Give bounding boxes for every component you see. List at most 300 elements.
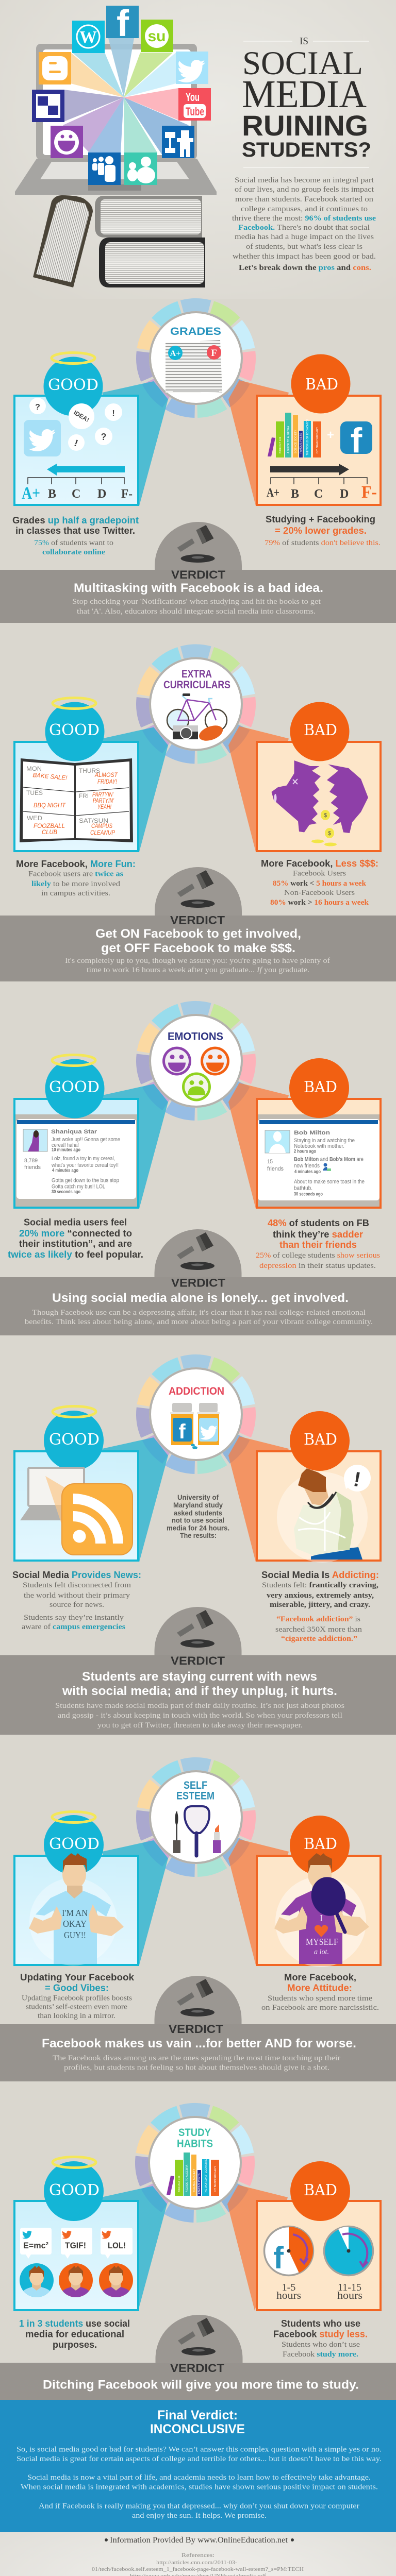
calendar: PARTYIN': [92, 791, 114, 798]
calendar: ALMOST: [94, 771, 118, 778]
caption: bad: = 20% lower grades.: [275, 526, 367, 536]
caption: bad: Students who don’t use: [282, 2341, 360, 2349]
text: study note: asked students: [174, 1509, 222, 1517]
clock labels: [276, 2282, 362, 2301]
panel: good: [14, 1811, 138, 1965]
panel: good: [14, 1055, 138, 1208]
wheel: self esteem: [102, 1742, 289, 1965]
icon: delicious: [32, 90, 64, 122]
shirt text: MYSELF: [306, 1937, 338, 1947]
calendar: MON: [26, 765, 42, 772]
tweet bubbles: [20, 2228, 133, 2259]
figure: narcissist: [274, 1853, 369, 1964]
title: RUINING: [242, 109, 368, 142]
final verdict heading: Final Verdict:: [157, 2408, 238, 2422]
clock labels: hours: [337, 2290, 362, 2301]
clock: 1-5 hours: [264, 2227, 314, 2275]
calendar: FOOZBALL: [34, 822, 65, 829]
panel: good: C: [72, 487, 80, 501]
caption: bad: 25% of college students show serious: [256, 1251, 380, 1260]
caption: bad: Facebook study more.: [283, 2350, 358, 2359]
icon: blogger: [39, 52, 71, 84]
caption: good: [8, 1217, 143, 1260]
profile: Bob Milton: Notebook with mother.: [294, 1143, 344, 1149]
icon: stumbleupon: su: [147, 28, 166, 45]
panel: good: ?: [101, 432, 106, 442]
icon: pill bottles: f: [178, 1420, 186, 1443]
calendar: CLEANUP: [90, 829, 115, 836]
text: study note: media for 24 hours.: [167, 1524, 229, 1532]
icon: books: FAMOUS POETS: [300, 433, 303, 453]
caption: good: Grades up half a gradepoint: [12, 515, 139, 526]
icon: exclamation bubble: [344, 1465, 371, 1492]
panel: good: GOOD: [49, 2181, 100, 2199]
verdict: addiction: [0, 1607, 396, 1735]
verdict: grades: Stop checking your 'Notifications' when studying and hit the books to get: [72, 598, 321, 606]
panel: bad: +: [327, 428, 334, 442]
panel: good: ?: [35, 403, 40, 412]
section: emotions: [0, 986, 396, 1335]
panel: good: GOOD: [48, 376, 98, 394]
panel: bad: [257, 1816, 381, 1967]
caption: bad: Non-Facebook Users: [284, 889, 355, 897]
caption: good: 75% of students want to: [34, 539, 113, 547]
wheel: study habits: STUDY: [178, 2127, 211, 2139]
calendar: FRI: [79, 792, 89, 800]
panel: good: [14, 1406, 138, 1561]
caption: good: [12, 515, 139, 556]
mirror: [307, 1873, 350, 1932]
caption: good: [16, 859, 136, 897]
profile: Shaniqua Star: cereal! haha!: [52, 1142, 79, 1148]
panel: bad: F-: [361, 483, 377, 502]
intro paragraph: Social media has become an integral part: [235, 176, 374, 184]
icon: broken piggy bank: $: [324, 812, 327, 819]
shirt text: [306, 1913, 338, 1956]
caption: good: collaborate online: [42, 548, 105, 556]
panel: bad: BAD: [304, 1431, 337, 1449]
profile: Bob Milton: [265, 1130, 365, 1197]
caption: good: likely to be more involved: [31, 880, 121, 888]
panel: good: B: [48, 487, 56, 501]
calendar: CLUB: [42, 828, 57, 836]
caption: good: in campus activities.: [41, 889, 110, 897]
icon: youtube: Tube: [186, 105, 204, 118]
profile: Bob Milton: About to make some toast in the: [294, 1179, 365, 1185]
clock: 1-5 hours: f: [273, 2241, 284, 2275]
icon: youtube: You: [186, 91, 200, 104]
profile: Shaniqua Star: Shaniqua Star: [51, 1129, 97, 1135]
icon: robot figures: [162, 126, 194, 158]
verdict: emotions: benefits. Think less about being alone, and more about being a part of your vibrant college community.: [25, 1318, 373, 1326]
icon: mirror, mascara, lipstick: [173, 1806, 221, 1856]
tweet bubbles: E=mc²: [23, 2241, 48, 2250]
tweet bubbles: TGIF!: [65, 2241, 86, 2250]
caption: good: the world without their primary: [24, 1591, 130, 1600]
icon: books: BIOLOGY 101: [178, 2176, 181, 2192]
icon: messenger: [124, 152, 157, 185]
icon: rss: [62, 1484, 133, 1555]
panel: bad: [257, 1411, 381, 1563]
caption: bad: [261, 1972, 379, 2012]
icon: wordpress: [72, 21, 105, 53]
caption: bad: than their friends: [279, 1240, 357, 1250]
wheel: study habits: [101, 2088, 288, 2311]
laptop: [15, 44, 217, 195]
profile: Bob Milton: bathtub.: [294, 1185, 312, 1192]
calendar: WED: [27, 815, 42, 822]
verdict: self esteem: [0, 1976, 396, 2081]
verdict: extra curriculars: time to work 16 hours a week after you graduate... If you graduate.: [87, 966, 309, 974]
shirt text: a lot.: [314, 1948, 329, 1956]
caption: bad: [265, 514, 381, 547]
panel: good: IDEA!: [72, 409, 91, 423]
caption: good: students’ self-esteem even more: [26, 2003, 127, 2011]
verdict: grades: [0, 522, 396, 623]
avatars: [19, 2263, 134, 2298]
verdict: self esteem: profiles, but students not feeling so hot about themselves should give it a shot.: [64, 2064, 329, 2072]
panel: bad: f: [351, 421, 362, 460]
panel: good: GOOD: [49, 1078, 100, 1096]
caption: good: in classes that use Twitter.: [15, 526, 135, 536]
icon: broken piggy bank: $: [328, 831, 331, 837]
intro paragraph: more than students. Facebook started on: [235, 195, 374, 204]
icon: yahoo: [51, 126, 83, 158]
profile: Bob Milton: 30 seconds ago: [294, 1192, 323, 1197]
title: IS: [300, 36, 308, 47]
title: SOCIAL: [242, 45, 363, 82]
caption: good: twice as likely to feel popular.: [8, 1249, 143, 1260]
wheel: self esteem: ESTEEM: [176, 1790, 214, 1802]
icon: stumbleupon: [141, 20, 173, 52]
verdict: emotions: [0, 1229, 396, 1335]
final verdict heading: INCONCLUSIVE: [150, 2422, 245, 2436]
profile: Bob Milton: Bob Milton and Bob's Mom are: [294, 1156, 364, 1162]
icon: broken piggy bank: [271, 760, 368, 846]
clock labels: hours: [276, 2290, 301, 2301]
wheel: grades: [102, 283, 289, 506]
icon: books: DIY BRAIN SURGERY: [316, 427, 319, 453]
icon: pill bottles: [170, 1403, 220, 1449]
caption: bad: searched 350X more than: [275, 1625, 362, 1634]
verdict: grades: Multitasking with Facebook is a bad idea.: [74, 581, 323, 595]
icon: facebook: f: [117, 3, 129, 44]
icon: exclamation bubble: !: [352, 1468, 362, 1492]
caption: bad: Studying + Facebooking: [266, 514, 375, 524]
wheel: extra curriculars: EXTRA: [182, 668, 212, 680]
calendar: YEAH!: [97, 803, 111, 810]
stack of books: [33, 195, 205, 287]
caption: bad: Facebook study less.: [273, 2329, 368, 2339]
shirt text: I'M AN: [62, 1908, 88, 1918]
verdict: study habits: [0, 2315, 396, 2400]
verdict: study habits: Ditching Facebook will give you more time to study.: [43, 2378, 359, 2392]
section: grades: [0, 283, 396, 623]
verdict: study habits: VERDICT: [170, 2362, 225, 2375]
caption: good: source for news.: [50, 1601, 104, 1609]
profile: Shaniqua Star: 4 minutes ago: [52, 1167, 78, 1173]
verdict: extra curriculars: VERDICT: [170, 914, 225, 926]
panel: bad: BAD: [304, 1835, 337, 1853]
panel: bad: C: [314, 487, 323, 501]
caption: bad: [261, 1570, 379, 1643]
final verdict text: and enjoy the sun. It helps. We promise.: [132, 2512, 267, 2520]
verdict: addiction: you to get off Twitter, threaten to take away their newspaper.: [97, 1721, 303, 1730]
section: study habits: [0, 2088, 396, 2400]
title: [242, 36, 371, 168]
panel: bad: [257, 702, 381, 851]
caption: bad: “Facebook addiction” is: [276, 1615, 360, 1623]
profile: Shaniqua Star: 8,789: [24, 1158, 38, 1164]
icon: books: BIOLOGY 101: [279, 437, 282, 453]
icon: books: THE WORLD OF ECONOMICS: [306, 419, 309, 455]
caption: bad: Students felt: frantically craving,: [262, 1581, 378, 1589]
caption: good: purposes.: [53, 2340, 97, 2350]
caption: good: media for educational: [25, 2329, 124, 2339]
caption: bad: 48% of students on FB: [268, 1218, 369, 1228]
caption: bad: depression in their status updates.: [259, 1262, 376, 1270]
intro paragraph: [232, 176, 376, 272]
profile: Bob Milton: now friends: [294, 1163, 320, 1169]
panel: good: GOOD: [49, 721, 100, 739]
verdict: self esteem: Facebook makes us vain ...for better AND for worse.: [42, 2037, 356, 2050]
final verdict text: And if Facebook is really making you that depressed... why don’t you shut down your computer: [39, 2502, 359, 2510]
references: References:: [182, 2552, 214, 2558]
wheel: extra curriculars: CURRICULARS: [163, 679, 230, 691]
profile: Shaniqua Star: [23, 1129, 120, 1194]
icon: bike, camera, football: [167, 693, 227, 743]
caption: good: Facebook users are twice as: [28, 870, 123, 878]
wheel: grades: A+: [170, 349, 180, 358]
panel: bad: BAD: [304, 1078, 337, 1096]
wheel: addiction: ADDICTION: [169, 1385, 224, 1397]
icon: sad face: [182, 1073, 211, 1101]
caption: good: More Facebook, More Fun:: [16, 859, 136, 869]
caption: good: than looking in a mirror.: [38, 2012, 116, 2020]
intro paragraph: whether this impact has been good or bad.: [233, 252, 376, 261]
panel: good: GOOD: [49, 1835, 100, 1853]
text: study note: not to use social: [172, 1516, 224, 1524]
profile: Bob Milton: Staying in and watching the: [294, 1138, 355, 1144]
wheel: self esteem: SELF: [184, 1780, 207, 1791]
verdict: self esteem: VERDICT: [169, 2023, 224, 2036]
caption: good: [19, 2318, 130, 2350]
icon: books: DIY BRAIN SURGERY: [214, 2165, 217, 2192]
verdict: grades: VERDICT: [171, 568, 226, 581]
calendar: [20, 758, 133, 842]
title: MEDIA: [242, 73, 367, 116]
verdict: extra curriculars: get OFF Facebook to make $$$.: [101, 941, 295, 955]
caption: good: [20, 1972, 135, 2020]
calendar: SAT/SUN: [79, 817, 108, 824]
references: 01/tech/facebook.self.esteem_1_facebook-page-facebook-wall-esteem?_s=PM:TECH: [92, 2566, 304, 2572]
tweet bubbles: LOL!: [108, 2241, 126, 2250]
intro paragraph: of students, but what's less clear is: [246, 243, 362, 251]
caption: bad: [273, 2318, 368, 2359]
panel: bad: BAD: [305, 376, 338, 394]
shirt text: [62, 1908, 88, 1940]
caption: good: Students say they’re instantly: [24, 1614, 124, 1622]
panel: bad: BAD: [304, 721, 337, 739]
panel: bad: B: [291, 487, 299, 501]
caption: good: 20% more “connected to: [19, 1228, 132, 1239]
shirt text: I: [320, 1913, 323, 1923]
intro paragraph: college campuses, and it continues to: [241, 205, 368, 213]
caption: good: Social Media Provides News:: [12, 1570, 141, 1580]
icon: books: A GUIDE TO ALGEBRA: [186, 2164, 189, 2192]
panel: good: F-: [121, 487, 133, 501]
calendar: FRIDAY!: [97, 778, 118, 785]
caption: bad: More Attitude:: [287, 1983, 352, 1993]
shirt text: GUY!!: [64, 1930, 86, 1940]
references: [57, 2552, 339, 2576]
icon: books: THE WORLD OF ECONOMICS: [205, 2157, 208, 2194]
text: study note: [167, 1493, 229, 1539]
verdict: extra curriculars: [0, 867, 396, 981]
verdict: addiction: with social media; and if they unplug, it hurts.: [62, 1684, 337, 1698]
profile: Shaniqua Star: Gotta get down to the bus stop: [52, 1178, 119, 1184]
shirt text: OKAY: [63, 1919, 87, 1929]
panel: good: [14, 352, 138, 505]
caption: good: aware of campus emergencies: [22, 1623, 125, 1631]
icon: wordpress: W: [79, 28, 97, 47]
caption: bad: [261, 858, 378, 907]
final verdict text: Social media is great for certain aspects of college and terrible for others... but it doesn’t have to be this way.: [16, 2455, 382, 2463]
caption: bad: “cigarette addiction.”: [281, 1635, 357, 1643]
panel: good: [14, 698, 138, 851]
profile: Shaniqua Star: 10 minutes ago: [52, 1147, 80, 1152]
icon: books: [268, 413, 321, 457]
panel: bad: [257, 2161, 381, 2310]
panel: good: !: [112, 409, 115, 418]
calendar: THURS: [79, 767, 100, 774]
clock: 11-15 hours: [324, 2227, 373, 2275]
colour rays: [63, 38, 189, 155]
icon: twitter: [176, 52, 208, 84]
final verdict text: Social media is now a vital part of life, and academia needs to learn how to effectively take advantage.: [27, 2473, 371, 2482]
wheel: addiction: [102, 1339, 289, 1562]
wheel: study habits: HABITS: [177, 2138, 213, 2149]
caption: bad: very anxious, extremely antsy,: [267, 1591, 374, 1600]
profile: Shaniqua Star: friends: [24, 1164, 41, 1171]
caption: good: 1 in 3 students use social: [19, 2318, 130, 2329]
intro paragraph: Facebook. There's no doubt that social: [238, 224, 370, 232]
footer: [0, 2532, 396, 2576]
final verdict text: [16, 2445, 382, 2520]
profile: Bob Milton: friends: [267, 1166, 284, 1172]
icon: facebook: [106, 3, 139, 44]
icon: books: SCIENCE SOCIETY: [193, 2168, 196, 2192]
verdict: addiction: Students are staying current with news: [82, 1670, 317, 1684]
panel: good: GOOD: [49, 1431, 100, 1449]
text: study note: Maryland study: [173, 1501, 223, 1509]
verdict: addiction: VERDICT: [171, 1654, 225, 1667]
calendar: PARTYIN': [93, 797, 114, 804]
verdict: emotions: VERDICT: [171, 1277, 226, 1289]
section: extra curriculars: [0, 629, 396, 981]
verdict: addiction: Students have made social media part of their daily routine. It’s not just about photos: [55, 1702, 344, 1710]
calendar: CAMPUS: [91, 822, 112, 829]
caption: good: = Good Vibes:: [45, 1983, 109, 1993]
intro paragraph: Let's break down the pros and cons.: [239, 264, 371, 272]
verdict: self esteem: The Facebook divas among us are the ones spending the most time touching up their: [53, 2054, 340, 2062]
profile: Bob Milton: 4 minutes ago: [294, 1169, 321, 1174]
caption: good: [12, 1570, 141, 1631]
panel: bad: [257, 1058, 381, 1208]
profile: Bob Milton: 15: [267, 1159, 273, 1165]
verdict: emotions: Using social media alone is lonely... get involved.: [52, 1291, 349, 1305]
profile: Shaniqua Star: 30 seconds ago: [52, 1189, 80, 1194]
caption: good: Updating Facebook profiles boosts: [22, 1994, 132, 2002]
wheel: emotions: EMOTIONS: [168, 1031, 223, 1043]
final verdict text: So, is social media good or bad for students? We can’t answer this complex question with a simple yes or no.: [16, 2445, 382, 2453]
figure: okay guy: [29, 1853, 124, 1964]
icon: books: ENGLISH: [171, 2180, 176, 2192]
caption: bad: More Facebook,: [284, 1972, 356, 1982]
profile: Shaniqua Star: Gotta catch my bus!! LOL: [52, 1183, 105, 1190]
verdict: grades: that 'A'. Also, educators should integrate social media into classrooms.: [77, 607, 316, 616]
verdict: addiction: and gossip - it’s about keeping in touch with the world. So when your professors tell: [58, 1711, 342, 1720]
text: study note: The results:: [180, 1531, 217, 1539]
caption: bad: More Facebook, Less $$$:: [261, 858, 378, 869]
icon: books: FAMOUS POETS: [198, 2173, 201, 2194]
caption: bad: 79% of students don't believe this.: [265, 539, 381, 547]
clock labels: 1-5: [282, 2282, 295, 2293]
icon: youtube: [178, 88, 211, 121]
caption: bad: Students who use: [281, 2318, 360, 2329]
final verdict heading: [150, 2408, 245, 2436]
panel: bad: [257, 354, 381, 505]
intro paragraph: of our lives, and no group feels its impact: [235, 185, 374, 194]
caption: bad: think they’re sadder: [273, 1229, 363, 1240]
panel: bad: D: [340, 487, 349, 501]
panel: good: A+: [22, 484, 40, 503]
icon: books: SCIENCE SOCIETY: [294, 430, 298, 453]
wheel: emotions: [102, 986, 289, 1209]
panel: good: D: [97, 487, 106, 501]
wheel: grades: GRADES: [170, 326, 221, 337]
caption: bad: on Facebook are more narcissistic.: [261, 2004, 379, 2012]
caption: bad: 85% work < 5 hours a week: [273, 879, 367, 888]
icon: books: [167, 2153, 219, 2196]
profile: Shaniqua Star: what's your favorite cereal toy!!: [51, 1162, 119, 1168]
title: STUDENTS?: [242, 139, 371, 161]
source credit: Information Provided By www.OnlineEducation.net: [110, 2536, 288, 2545]
panel: good: [14, 2157, 138, 2310]
caption: bad: miserable, jittery, and crazy.: [270, 1601, 370, 1609]
panel: bad: A+: [267, 486, 279, 500]
icon: laptop: [20, 1467, 85, 1525]
icon: books: A GUIDE TO ALGEBRA: [287, 426, 290, 453]
caption: good: Students felt disconnected from: [23, 1581, 131, 1589]
caption: bad: Facebook Users: [293, 870, 346, 878]
wheel: extra curriculars: [102, 629, 289, 852]
hero illustration: laptop, social icons and books: [15, 3, 217, 287]
caption: bad: Students who spend more time: [268, 1994, 372, 2003]
profile: Shaniqua Star: Lolz, found a toy in my cereal,: [52, 1156, 115, 1162]
text: study note: University of: [177, 1493, 219, 1501]
profile: Bob Milton: 2 hours ago: [294, 1149, 316, 1154]
caption: good: Social media users feel: [24, 1217, 127, 1227]
intro paragraph: media has had a huge impact on the lives: [235, 233, 374, 241]
wheel: grades: F: [211, 348, 217, 359]
intro paragraph: thrive there the most: 96% of students use: [232, 214, 376, 223]
final verdict panel: [0, 2400, 396, 2532]
calendar: BAKE SALE!: [32, 771, 68, 782]
profile: Shaniqua Star: Just woke up!! Gonna get some: [52, 1137, 120, 1143]
verdict: emotions: Though Facebook use can be a depressing affair, it's clear that it has real college-related emotional: [32, 1309, 366, 1317]
section: addiction: [0, 1339, 396, 1735]
